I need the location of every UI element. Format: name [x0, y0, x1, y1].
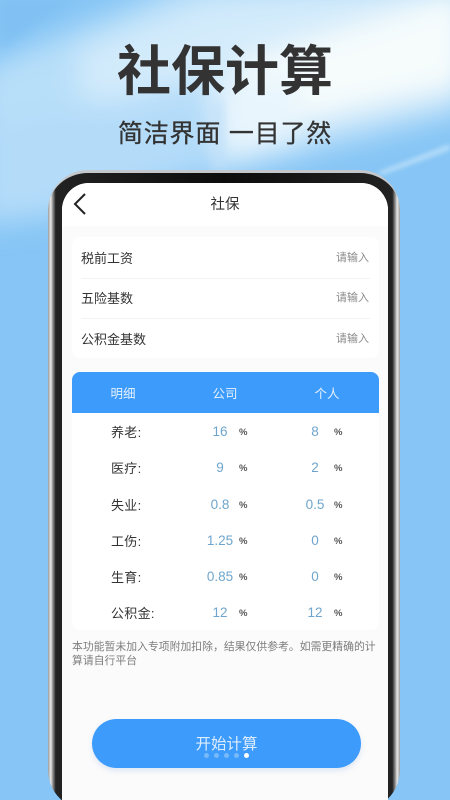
row: medical: % — [239, 463, 247, 474]
input row: salary: 税前工资 — [81, 251, 133, 266]
icon: back arrow — [74, 193, 86, 215]
row: pension: 8 — [311, 424, 319, 439]
row: maternity: 0 — [311, 569, 319, 584]
row: unemployment: % — [334, 500, 342, 511]
input row: salary: 请输入 — [336, 252, 369, 264]
phone frame — [48, 170, 400, 800]
row: injury: % — [239, 536, 247, 547]
row: unemployment: 0.5 — [306, 497, 324, 512]
row: housing fund — [111, 605, 342, 621]
row: housing fund: 公积金: — [111, 606, 155, 621]
row: medical: 2 — [311, 460, 319, 475]
row: pension: 养老: — [111, 425, 142, 440]
input row: salary — [81, 237, 370, 279]
row: maternity — [111, 569, 342, 585]
subtitle: 简洁界面 一目了然 — [118, 120, 332, 148]
table header: 明细 — [110, 387, 136, 401]
row: housing fund: 12 — [212, 605, 228, 620]
row: maternity: 0.85 — [207, 569, 233, 584]
input row: housing fund base: 请输入 — [336, 333, 369, 345]
table header — [72, 372, 379, 413]
input row: insurance base — [81, 278, 370, 319]
input row: housing fund base: 公积金基数 — [81, 332, 146, 347]
row: injury: 工伤: — [111, 534, 142, 549]
row: medical: 9 — [216, 460, 224, 475]
row: maternity: 生育: — [111, 570, 142, 585]
row: pension — [111, 424, 342, 440]
row: medical: % — [334, 463, 342, 474]
app header — [62, 183, 388, 226]
header title: 社保 — [210, 197, 240, 213]
row: pension: % — [239, 427, 247, 438]
row: maternity: % — [239, 572, 247, 583]
row: maternity: % — [334, 572, 342, 583]
row: unemployment: % — [239, 500, 247, 511]
row: injury: 0 — [311, 533, 319, 548]
row: housing fund: 12 — [307, 605, 323, 620]
row: unemployment: 0.8 — [211, 497, 229, 512]
row: unemployment: 失业: — [111, 498, 142, 513]
page indicator dots — [204, 753, 249, 758]
row: housing fund: % — [334, 608, 342, 619]
input row: housing fund base — [81, 332, 369, 347]
input row: insurance base: 五险基数 — [81, 291, 133, 306]
title: 社保计算 — [117, 42, 333, 102]
row: medical: 医疗: — [111, 461, 142, 476]
row: pension: % — [334, 427, 342, 438]
table header: 个人 — [314, 387, 340, 401]
panel: input form — [72, 237, 379, 358]
button label: 开始计算 — [195, 736, 258, 753]
panel: rates table — [72, 372, 379, 630]
start calculation button — [92, 719, 361, 768]
table header: 公司 — [212, 387, 238, 401]
row: unemployment — [111, 497, 342, 513]
row: pension: 16 — [212, 424, 228, 439]
phone screen — [62, 183, 388, 800]
row: injury: 1.25 — [207, 533, 233, 548]
row: housing fund: % — [239, 608, 247, 619]
disclaimer text: 本功能暂未加入专项附加扣除，结果仅供参考。如需更精确的计算请自行平台 — [72, 641, 376, 666]
row: medical — [111, 460, 342, 476]
row: injury: % — [334, 536, 342, 547]
input row: insurance base: 请输入 — [336, 292, 369, 304]
row: injury — [111, 533, 342, 549]
